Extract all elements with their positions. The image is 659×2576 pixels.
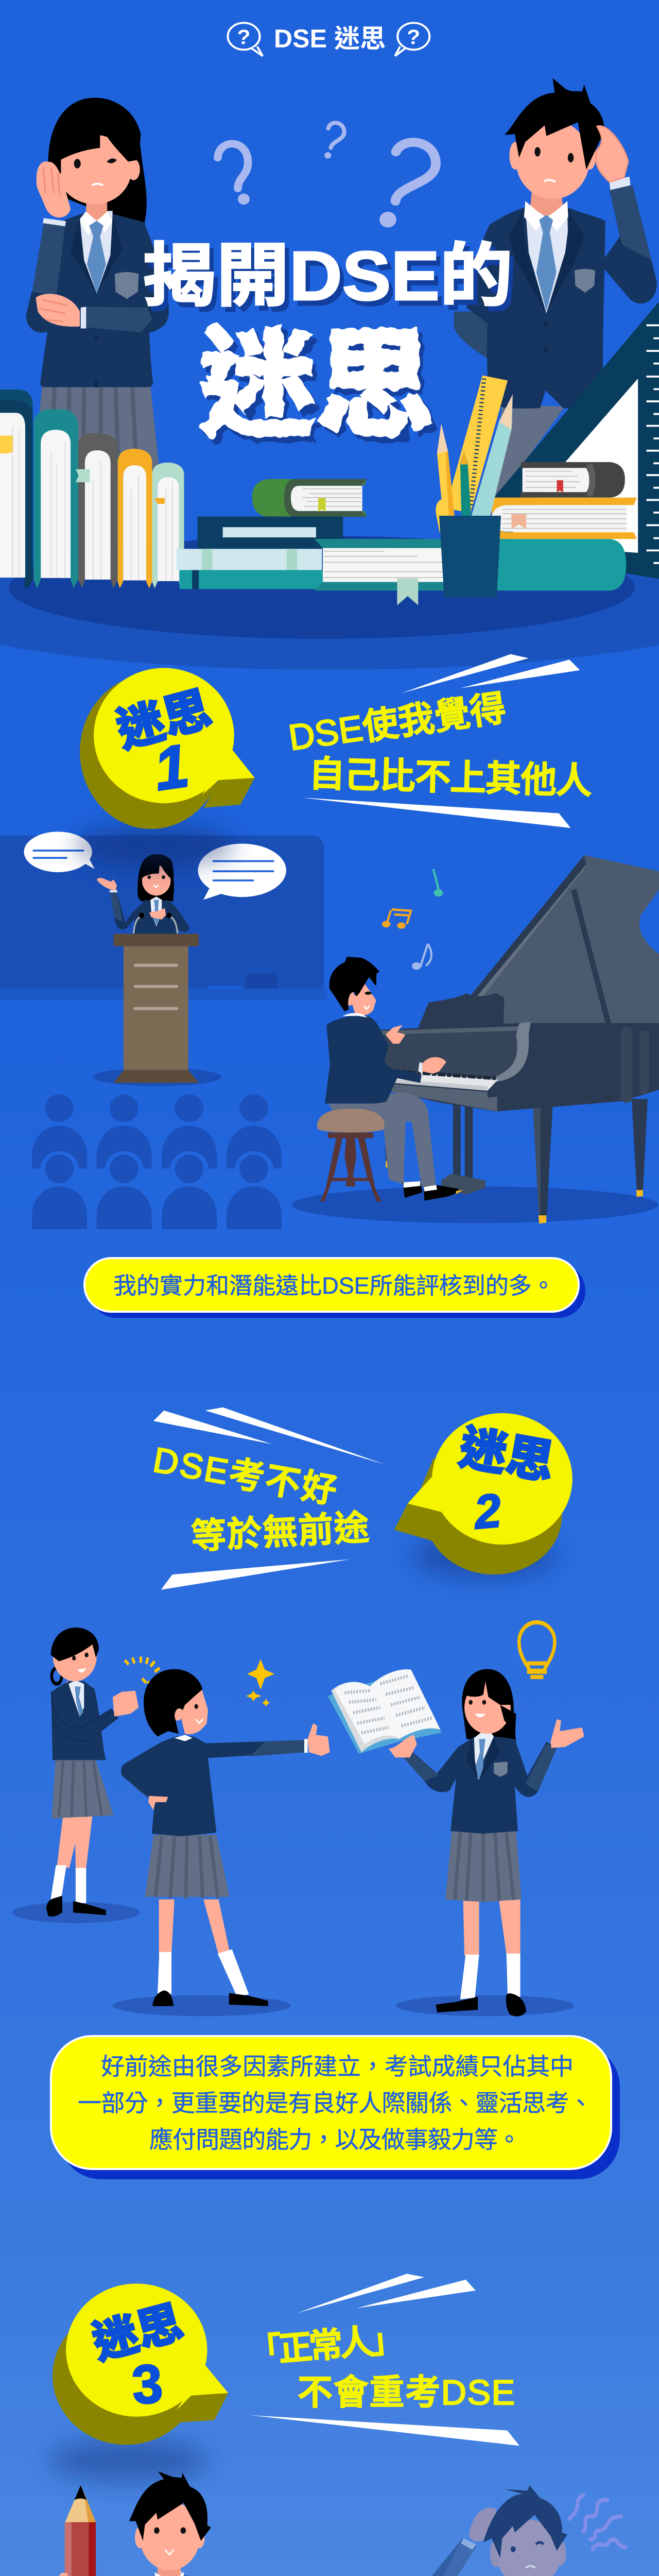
callout: myth 1 <box>84 1258 585 1318</box>
section 3 illustrations <box>18 2471 641 2576</box>
title line 2: 迷思 <box>198 319 434 452</box>
figure: thinking girl <box>26 98 169 473</box>
speech bubble large <box>198 844 286 900</box>
heading: myth 2 <box>150 1440 370 1556</box>
speech bubble: myth 1: 1 <box>150 732 193 804</box>
title line 2: 迷思 <box>202 324 438 457</box>
icon: left question bubble: ? <box>237 26 250 48</box>
ground ellipse: hero inner <box>9 536 635 639</box>
speech bubble: myth 2: 2 <box>471 1484 503 1539</box>
icon: hand on pencil <box>58 2573 68 2576</box>
icon: book stack right <box>492 462 637 539</box>
stage backdrop <box>0 835 324 989</box>
heading: myth 2: DSE考不好 <box>150 1440 340 1511</box>
icon: light bulb <box>519 1622 555 1677</box>
audience <box>32 1094 282 1229</box>
piano stool <box>317 1109 385 1201</box>
hero illustration <box>0 23 659 605</box>
figure: piano boy <box>325 957 463 1200</box>
callout: myth 1: 我的實力和潛能遠比DSE所能評核到的多。 <box>113 1273 555 1299</box>
figure: faded worried boy <box>424 2485 641 2576</box>
speech bubble: myth 3: 迷思 <box>87 2296 188 2369</box>
figure: clapping girl <box>46 1628 160 1917</box>
heading: myth 1 <box>286 688 593 801</box>
figure: thinking boy <box>454 78 657 501</box>
speech bubble: myth 2 <box>394 1413 573 1579</box>
music notes <box>382 869 443 970</box>
icon: sparkles <box>246 1659 274 1706</box>
podium <box>113 934 199 1083</box>
heading: myth 1: 自己比不上其他人 <box>308 754 593 801</box>
speed lines: myth 3 <box>250 2274 519 2446</box>
stage floor strip <box>0 989 327 1000</box>
figure: thumbs-up girl <box>121 1669 330 2006</box>
heading: myth 3 <box>246 2319 515 2412</box>
speech bubble: myth 3: 3 <box>130 2353 165 2416</box>
callout: myth 2: 好前途由很多因素所建立，考試成績只佔其中 <box>101 2053 574 2080</box>
icon: question mark left <box>218 144 250 205</box>
figure: idea girl <box>389 1669 584 2016</box>
heading: myth 3: 不會重考DSE <box>298 2373 515 2412</box>
ground shadow: podium <box>93 1067 221 1086</box>
icon: stress squiggles <box>569 2495 626 2549</box>
icon: open book <box>328 1669 441 1754</box>
podium seat back <box>246 973 278 989</box>
ground shadow: piano <box>292 1187 658 1223</box>
icon: ruler <box>445 376 508 513</box>
heading: myth 3: 「正常人」 <box>246 2319 406 2371</box>
icon: question mark large <box>379 142 436 228</box>
ground shadows <box>12 1902 574 2016</box>
callout: myth 2: 一部分，更重要的是有良好人際關係、靈活思考、 <box>78 2090 593 2116</box>
icon: question mark small <box>324 123 344 159</box>
speech bubble: myth 1 <box>75 668 255 867</box>
icon: upright books left <box>0 389 184 588</box>
speech bubble small <box>24 832 95 872</box>
section 2 illustrations <box>12 1622 584 2016</box>
icon: large teal book <box>315 539 626 605</box>
heading: myth 2: 等於無前途 <box>190 1508 370 1556</box>
speech bubble: myth 2: 迷思 <box>455 1421 558 1489</box>
icon: right question bubble: ? <box>407 26 420 48</box>
section 1 illustrations <box>0 832 659 1229</box>
speed lines: myth 2 <box>153 1408 386 1590</box>
icon: triangle ruler <box>494 301 659 579</box>
callout: myth 2 <box>51 2036 620 2179</box>
icon: right question bubble <box>395 23 429 56</box>
icon: pens in cup <box>436 394 513 597</box>
icon: stacked books centre <box>177 479 367 589</box>
icon: left question bubble <box>228 23 263 56</box>
ground ellipse: hero outer <box>0 541 659 670</box>
figure: standing boy <box>95 2471 237 2576</box>
heading: myth 1: DSE使我覺得 <box>286 688 508 758</box>
speed lines: myth 1 <box>302 654 580 828</box>
callout: myth 2: 應付問題的能力，以及做事毅力等。 <box>149 2126 521 2153</box>
figure: speaker girl <box>97 854 189 934</box>
speech bubble: myth 3 <box>49 2283 228 2482</box>
figure: piano <box>377 855 659 1224</box>
header text: DSE 迷思 <box>274 24 386 53</box>
speech bubble: myth 1: 迷思 <box>111 683 216 758</box>
title line 1: 揭開DSE的 <box>147 242 517 320</box>
title line 1: 揭開DSE的 <box>143 237 513 315</box>
icon: giant pencil <box>65 2485 96 2576</box>
